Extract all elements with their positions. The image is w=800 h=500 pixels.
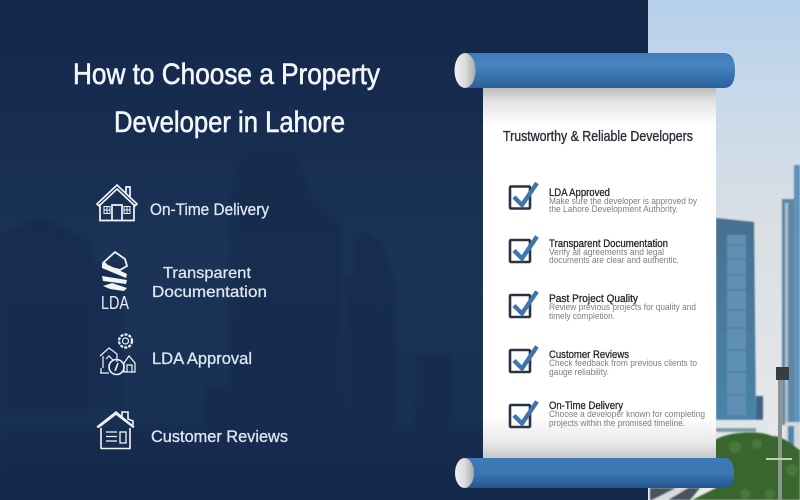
item text [549,349,697,377]
item text: Choose a developer known for completing [549,409,705,419]
feature: LDA approval [100,334,252,374]
item text: Verify all agreements and legal [549,247,664,257]
item text: Review previous projects for quality and [549,302,696,312]
checklist item: past project quality [510,292,696,321]
label: transparent documentation: Transparent [163,265,252,282]
icon: LDA document badge: LDA [101,293,129,313]
feature: customer reviews [97,412,288,448]
item text: Check feedback from previous clients to [549,358,697,368]
checklist item: on-time delivery [510,400,705,428]
label: customer reviews: Customer Reviews [151,427,288,446]
street lamp [766,367,792,500]
title: How to Choose a Property [73,58,380,91]
item text [549,187,697,214]
icon: gear and houses [100,334,135,374]
item text: timely completion. [549,311,615,321]
checklist item: customer reviews [510,346,697,377]
item text: On-Time Delivery [549,400,623,412]
item text [549,238,679,265]
icon: checkbox [510,292,537,317]
icon: house with windows [97,185,137,220]
label: on-time delivery: On-Time Delivery [150,200,269,219]
icon: checkbox [510,183,537,208]
item text: documents are clear and authentic. [549,255,679,265]
item text: Past Project Quality [549,293,638,305]
ghost city skyline [0,150,648,500]
icon: house with document [97,412,134,448]
feature: transparent documentation [101,252,267,313]
icon: LDA document badge [101,252,129,313]
icon: checkbox [510,236,537,262]
item text: Transparent Documentation [549,238,668,250]
item text: gauge reliability. [549,367,609,377]
panel: scroll [454,53,735,488]
label: transparent documentation: Documentation [152,284,267,301]
item text: projects within the promised timeline. [549,418,685,428]
building: right towers [782,165,800,454]
panel: city photo [648,0,800,500]
top roller [454,53,735,88]
feature list [97,185,288,448]
item text [549,400,705,428]
checklist item: transparent documentation [510,236,679,265]
item text: Customer Reviews [549,349,629,361]
item text: the Lahore Development Authority. [549,204,678,214]
feature: on-time delivery [97,185,269,220]
label: LDA approval: LDA Approval [152,349,252,368]
scroll paper [483,88,716,460]
icon: checkbox [510,402,537,427]
item text: LDA Approved [549,187,610,199]
checklist item: LDA approved [510,183,697,214]
item text: Make sure the developer is approved by [549,196,697,206]
title: Developer in Lahore [114,106,345,139]
scroll heading: Trustworthy & Reliable Developers [503,129,693,145]
icon: checkbox [510,346,537,372]
building: left tower [716,218,767,435]
label: transparent documentation [152,265,267,301]
item text [549,293,696,321]
trees [692,432,800,500]
title [73,58,380,139]
bottom roller [455,458,734,488]
road [650,488,700,500]
